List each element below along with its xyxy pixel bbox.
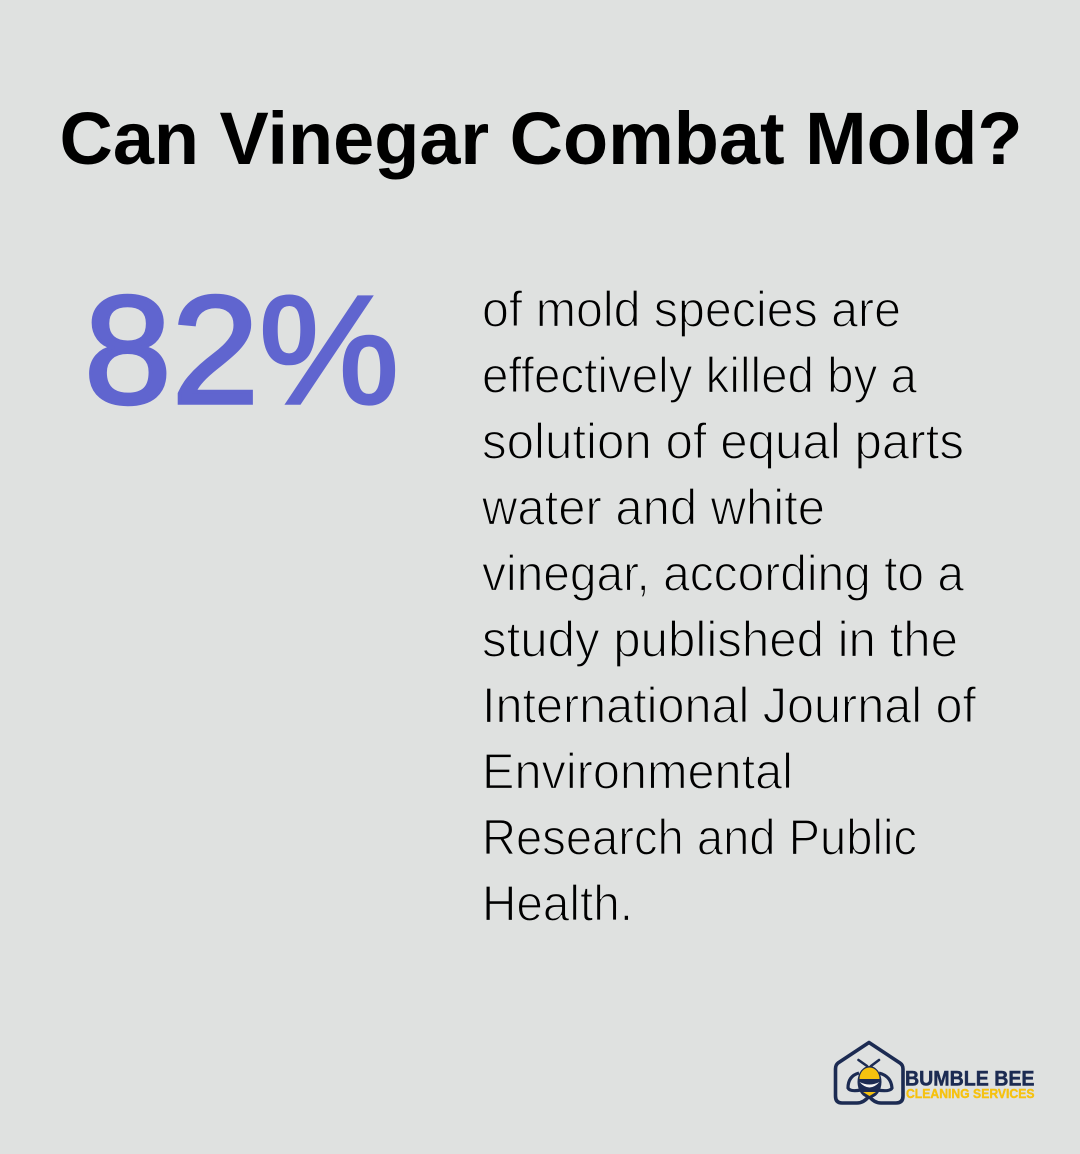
body text block: solution of equal parts (482, 414, 964, 470)
body text block: Health. (482, 876, 633, 932)
icon: bee (848, 1060, 892, 1098)
big statistic: 82%: 82% (84, 264, 399, 436)
body text block: vinegar, according to a (482, 546, 964, 602)
body text block: effectively killed by a (482, 348, 917, 404)
body text block: International Journal of (482, 678, 976, 734)
body text block: of mold species are (482, 282, 901, 338)
logo: Bumble Bee Cleaning Services (836, 1042, 1035, 1103)
body text block: Research and Public (482, 810, 917, 866)
logo tagline: CLEANING SERVICES (906, 1086, 1035, 1101)
title: Can Vinegar Combat Mold? (60, 97, 1022, 180)
body text block: Environmental (482, 744, 793, 800)
logo wordmark: BUMBLE BEE (905, 1066, 1034, 1090)
icon: house outline (836, 1042, 903, 1103)
body text block: water and white (481, 480, 825, 536)
body text block (481, 282, 976, 932)
body text block: study published in the (482, 612, 958, 668)
